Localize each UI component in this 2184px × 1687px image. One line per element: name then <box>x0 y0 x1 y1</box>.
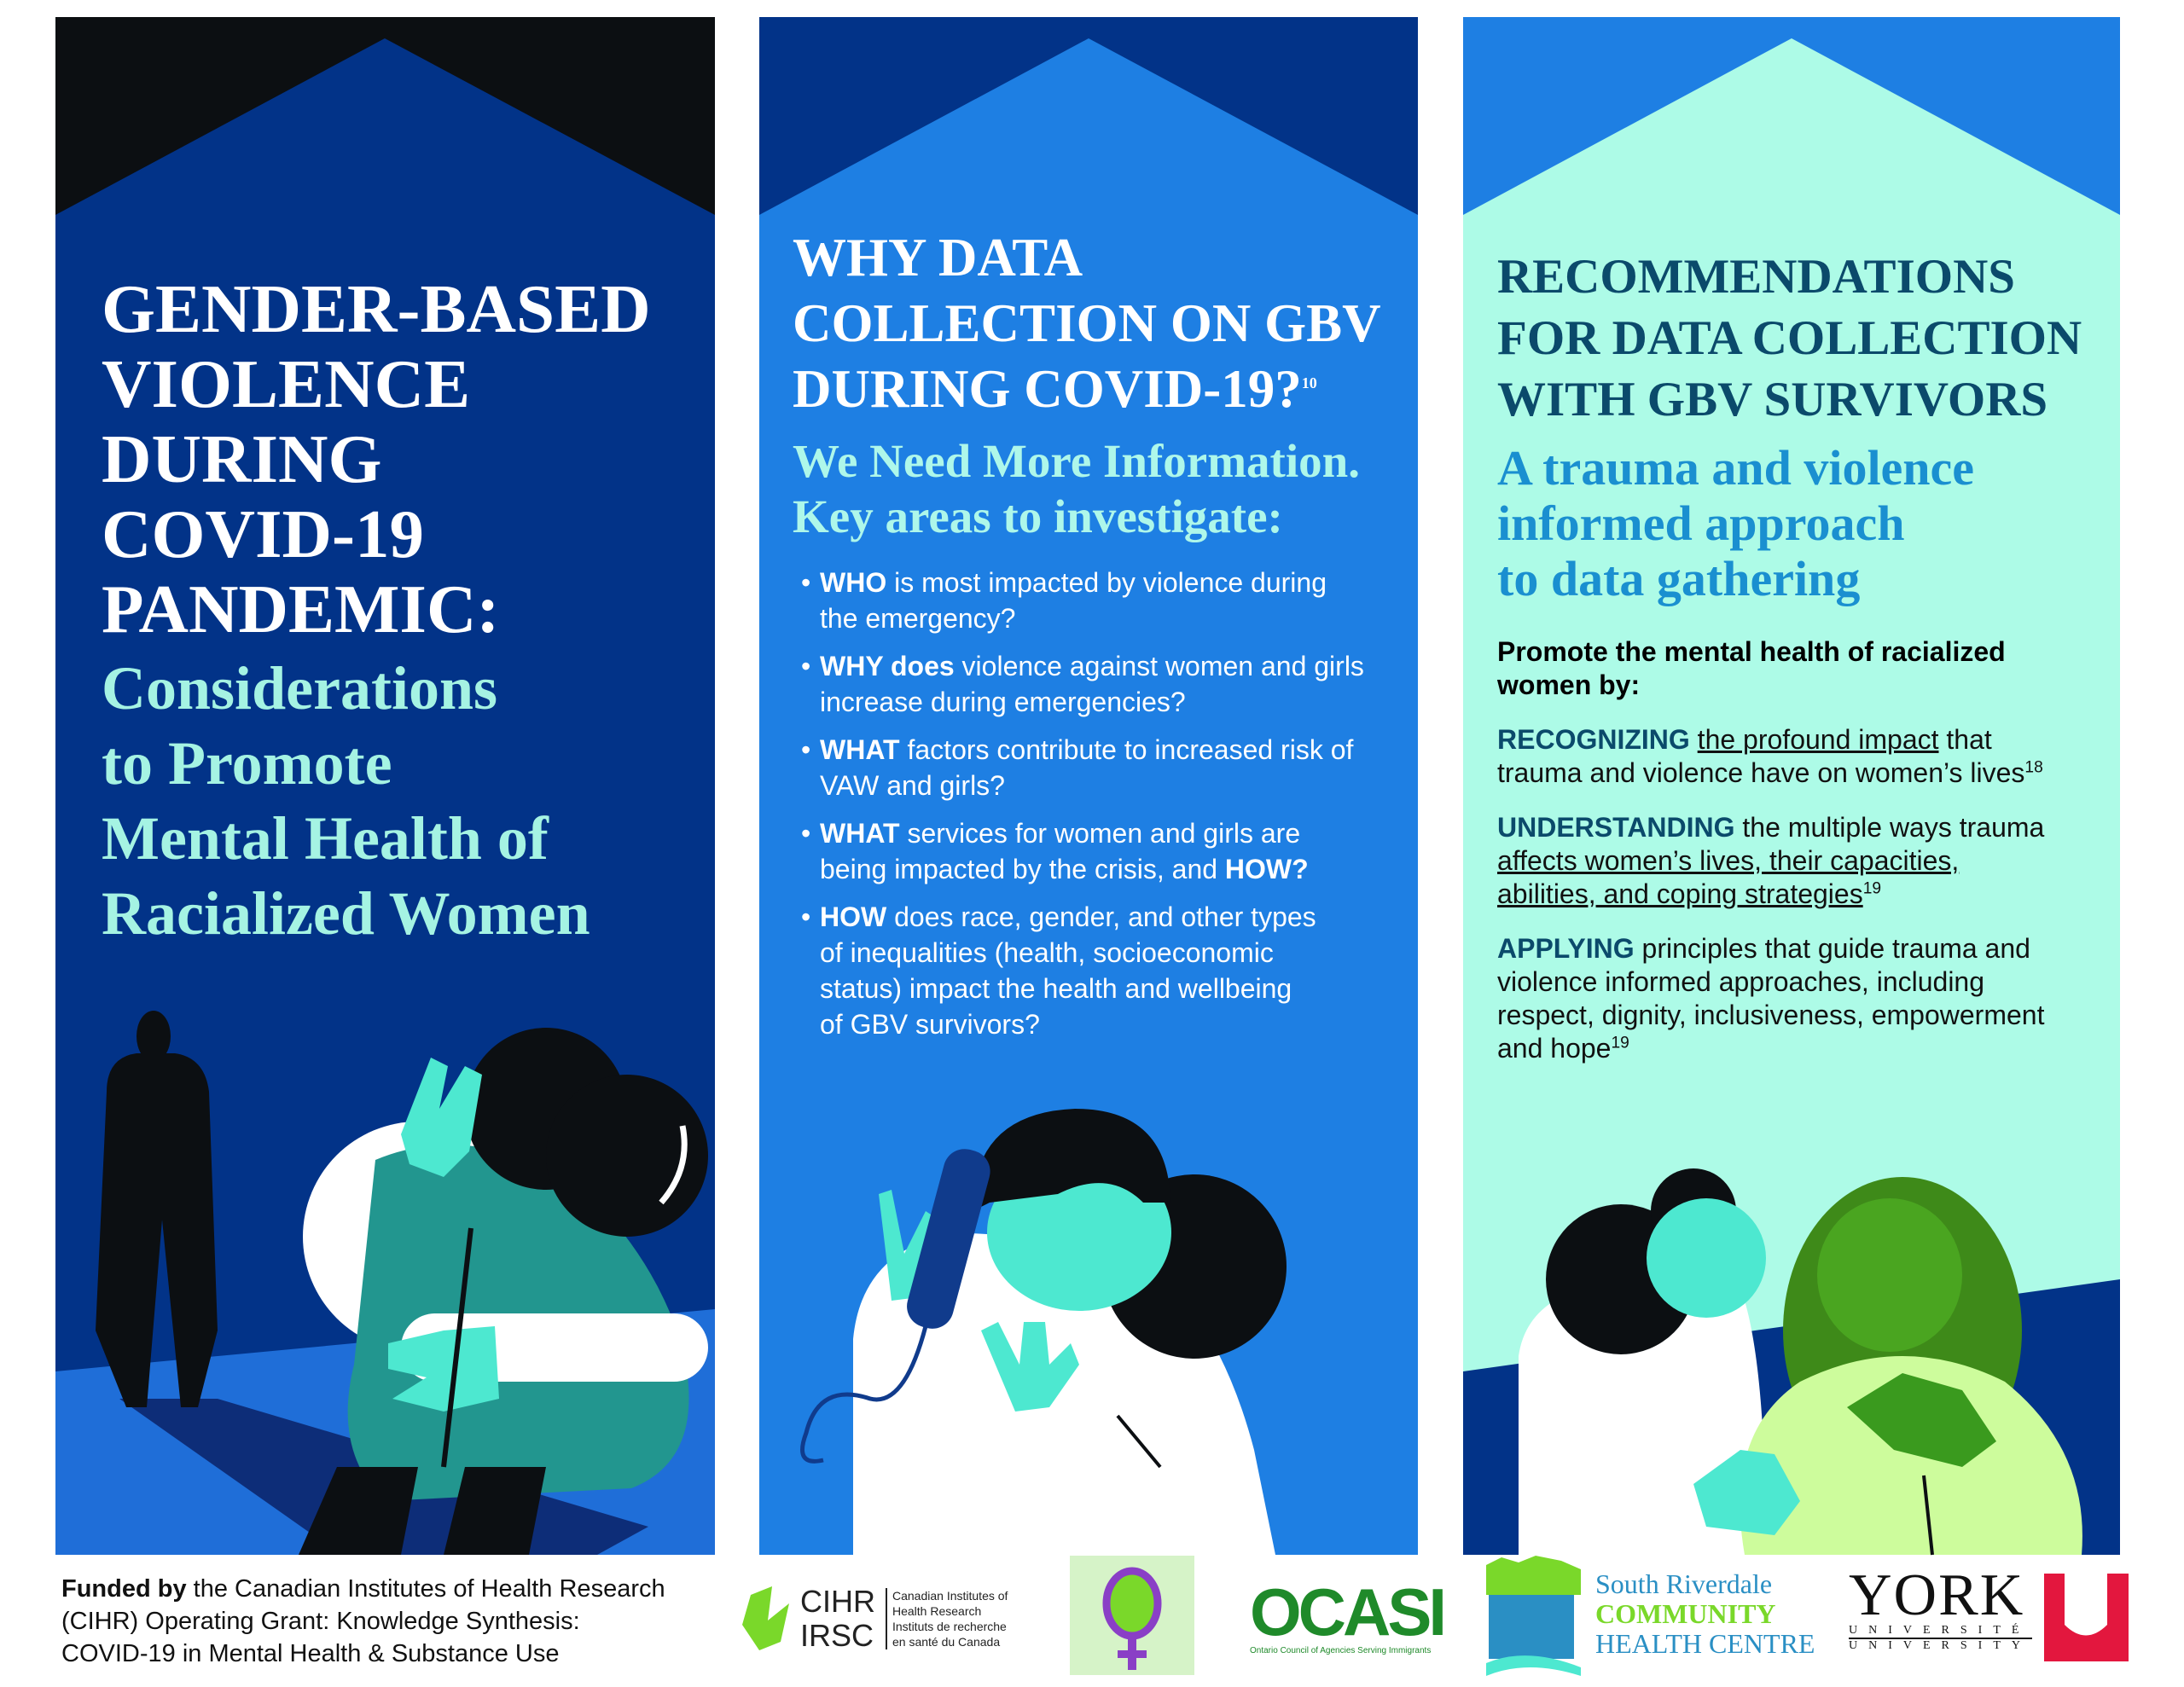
logo: York red U <box>2044 1574 2129 1661</box>
title: panel 3 <box>1497 250 2082 426</box>
footer: funding text: (CIHR) Operating Grant: Knowledge Synthesis: <box>61 1608 580 1635</box>
bullet list: key areas: status) impact the health and wellbeing <box>820 973 1292 1004</box>
title: panel 1: VIOLENCE <box>102 345 470 422</box>
illustration: shadow figure <box>96 1011 648 1555</box>
logo text: York University: UNIVERSITY <box>1849 1639 2031 1652</box>
bullet list: key areas: HOW does race, gender, and other types <box>820 901 1316 932</box>
subtitle: panel 1: Racialized Women <box>102 879 590 948</box>
illustration: crouching woman <box>299 1028 708 1555</box>
logo text: York University: UNIVERSITÉ <box>1849 1624 2030 1637</box>
text block: recommendations: respect, dignity, inclusiveness, empowerment <box>1497 1000 2044 1030</box>
bullet list: key areas: of GBV survivors? <box>820 1009 1040 1040</box>
text block: recommendations: affects women’s lives, their capacities, <box>1497 845 1959 876</box>
logo: South Riverdale building <box>1486 1556 1581 1676</box>
logo: venus symbol <box>1070 1556 1194 1675</box>
title: panel 3: FOR DATA COLLECTION <box>1497 311 2082 365</box>
subtitle: panel 3 <box>1497 440 1974 606</box>
text block: recommendations: RECOGNIZING the profound impact that <box>1497 724 1992 755</box>
title: panel 2: WHY DATA <box>793 228 1083 287</box>
logo text: CIHR: Canadian Institutes of <box>892 1589 1008 1603</box>
logo text: CIHR: en santé du Canada <box>892 1635 1000 1649</box>
logo text: CIHR: Instituts de recherche <box>892 1620 1007 1633</box>
text block: recommendations: women by: <box>1497 670 1640 700</box>
bullet list: key areas: the emergency? <box>820 603 1015 634</box>
logo text: South Riverdale <box>1595 1568 1815 1659</box>
subtitle: panel 2: Key areas to investigate: <box>793 490 1283 542</box>
bullet list: key areas <box>802 567 1364 1040</box>
logo: CIHR leaf <box>742 1586 789 1650</box>
bullet list: key areas: WHAT services for women and girls are <box>820 818 1300 849</box>
title: panel 2 <box>793 228 1381 419</box>
footer: funding text: Funded by the Canadian Institutes of Health Research <box>61 1575 665 1603</box>
subtitle: panel 2 <box>793 435 1360 542</box>
logo text: South Riverdale: South Riverdale <box>1595 1568 1772 1599</box>
bullet list: key areas: WHY does violence against women and girls <box>820 651 1364 681</box>
logo text: CIHR: IRSC <box>800 1618 874 1653</box>
text block: recommendations: APPLYING principles that guide trauma and <box>1497 933 2030 964</box>
text block: recommendations: and hope19 <box>1497 1033 1629 1064</box>
logo text: South Riverdale: HEALTH CENTRE <box>1595 1628 1815 1659</box>
title: panel 1: GENDER-BASED <box>102 270 651 347</box>
text block: recommendations: UNDERSTANDING the multiple ways trauma <box>1497 812 2044 843</box>
panel: right background <box>1463 17 2120 1555</box>
bullet list: key areas: increase during emergencies? <box>820 687 1186 717</box>
subtitle: panel 1 <box>102 654 590 948</box>
text block: recommendations: abilities, and coping strategies19 <box>1497 878 1881 909</box>
subtitle: panel 2: We Need More Information. <box>793 435 1360 487</box>
title: panel 1: DURING <box>102 420 382 497</box>
logo text: South Riverdale: COMMUNITY <box>1595 1598 1776 1629</box>
footer: funding text <box>61 1575 665 1667</box>
title: panel 2: DURING COVID-19?10 <box>793 359 1317 419</box>
title: panel 2: COLLECTION ON GBV <box>793 293 1381 353</box>
text block: recommendations <box>1496 636 2044 1064</box>
subtitle: panel 3: informed approach <box>1497 496 1904 551</box>
title: panel 3: WITH GBV SURVIVORS <box>1497 373 2048 426</box>
title: panel 1: COVID-19 <box>102 496 424 572</box>
illustration: two women <box>1519 1168 2082 1555</box>
bullet list: key areas: being impacted by the crisis, and HOW? <box>820 854 1309 884</box>
illustration: woman on phone <box>802 1109 1287 1555</box>
logo text: OCASI: Ontario Council of Agencies Serving Immigrants <box>1250 1646 1431 1655</box>
text block: recommendations: violence informed approaches, including <box>1497 966 1984 997</box>
subtitle: panel 3: to data gathering <box>1497 551 1860 606</box>
logo text: CIHR <box>800 1584 1008 1653</box>
subtitle: panel 1: Mental Health of <box>102 804 549 872</box>
bullet list: key areas: of inequalities (health, socioeconomic <box>820 937 1274 968</box>
bullet list: key areas: WHAT factors contribute to increased risk of <box>820 734 1353 765</box>
title: panel 1: PANDEMIC: <box>102 571 499 647</box>
subtitle: panel 1: to Promote <box>102 729 392 797</box>
title: panel 3: RECOMMENDATIONS <box>1497 250 2015 304</box>
text block: recommendations: Promote the mental health of racialized <box>1497 636 2006 667</box>
logo text: CIHR: CIHR <box>800 1584 875 1619</box>
bullet list: key areas: VAW and girls? <box>820 770 1005 801</box>
subtitle: panel 1: Considerations <box>102 654 497 722</box>
logo text: York University: YORK <box>1849 1562 2024 1628</box>
logo text: CIHR: Health Research <box>892 1604 981 1618</box>
footer: funding text: COVID-19 in Mental Health & Substance Use <box>61 1640 560 1667</box>
text block: recommendations: trauma and violence have on women’s lives18 <box>1497 757 2043 788</box>
panel: left background <box>55 17 715 1555</box>
subtitle: panel 3: A trauma and violence <box>1497 440 1974 496</box>
panel: middle background <box>759 17 1418 1555</box>
bullet list: key areas: WHO is most impacted by violence during <box>820 567 1327 598</box>
logo text: OCASI: OCASI <box>1250 1574 1443 1649</box>
title: panel 1 <box>102 270 651 647</box>
